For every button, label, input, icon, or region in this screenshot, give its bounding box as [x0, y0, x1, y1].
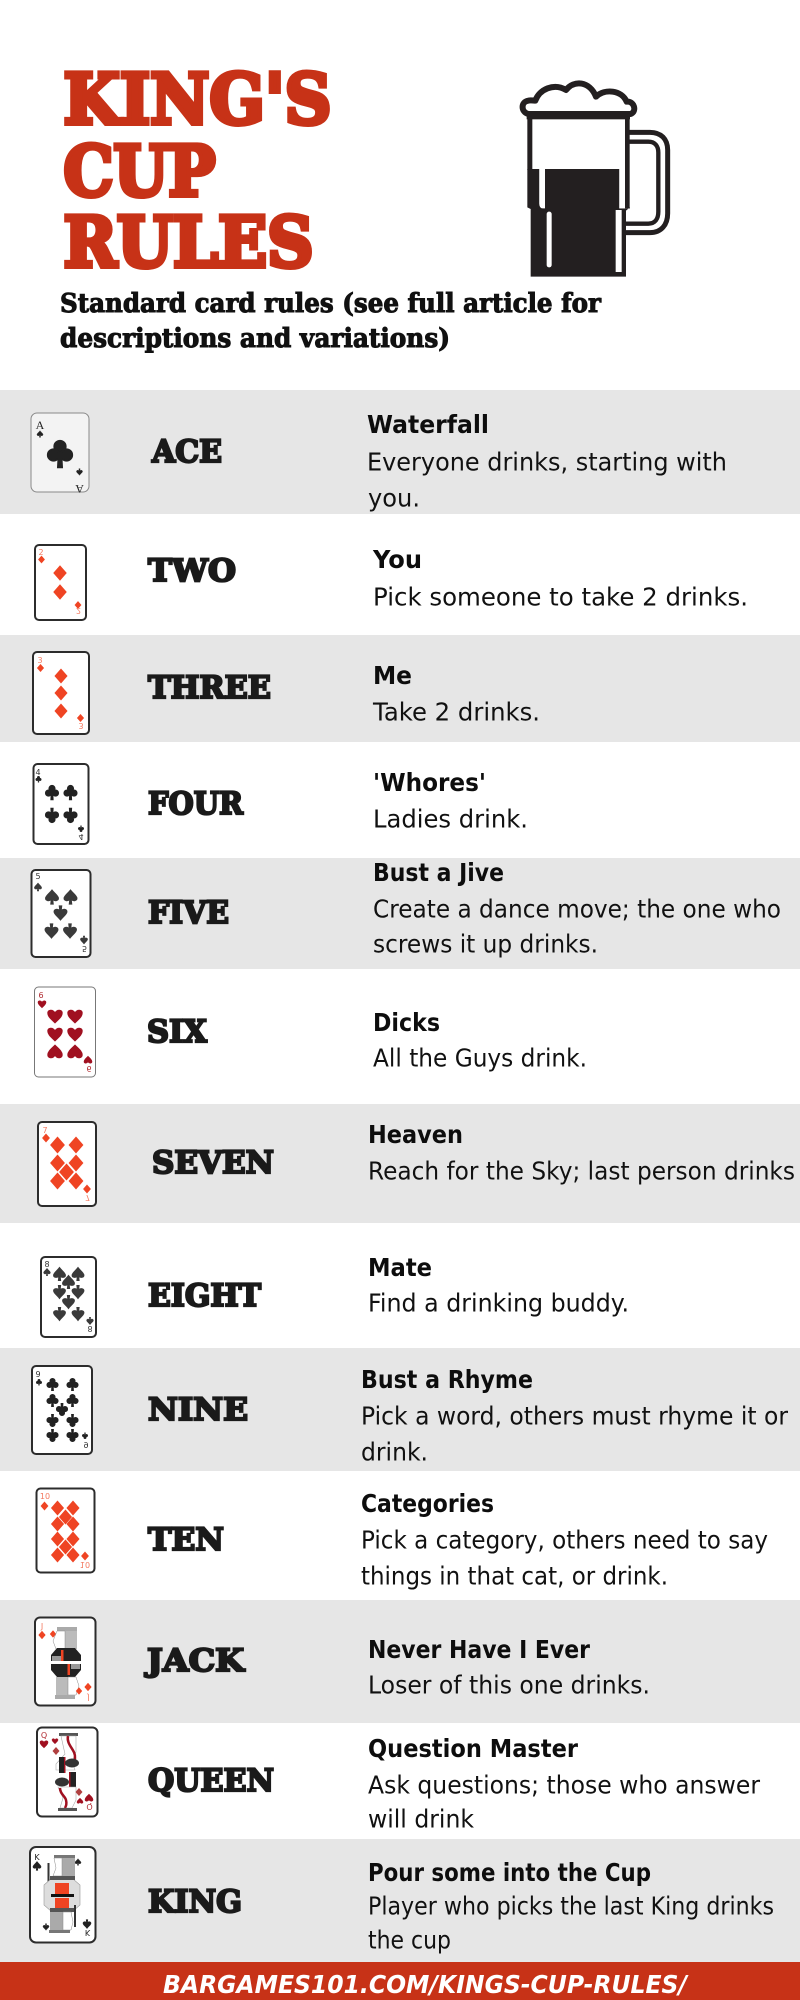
icon: ace of clubs card	[31, 413, 89, 496]
rule: Bust a Rhyme: drink.	[361, 1438, 428, 1466]
rule: 'Whores'	[373, 768, 528, 834]
label: FOUR: FOUR	[148, 786, 243, 822]
icon: jack of diamonds card: J	[86, 1693, 90, 1702]
icon: nine of clubs card: 9	[83, 1440, 89, 1449]
rule: Waterfall	[367, 410, 727, 512]
icon: seven of diamonds card: 7	[42, 1126, 48, 1135]
label: EIGHT: EIGHT	[148, 1278, 261, 1314]
panel: eight	[41, 1253, 629, 1337]
subtitle: Standard card rules (see full article for	[60, 289, 601, 319]
rule: 'Whores': 'Whores'	[373, 768, 486, 797]
subtitle	[60, 289, 601, 354]
rule: Question Master: Question Master	[368, 1734, 579, 1763]
label: TWO: TWO	[148, 553, 236, 589]
rule: Never Have I Ever: Never Have I Ever	[368, 1635, 591, 1664]
rule: Bust a Jive: Create a dance move; the one who	[373, 894, 781, 924]
icon: two of diamonds card: 2	[76, 606, 81, 615]
rule: Heaven	[368, 1120, 795, 1186]
rule: Heaven: Heaven	[368, 1120, 463, 1149]
rule: Waterfall: Waterfall	[367, 410, 489, 439]
rule: Categories	[361, 1489, 768, 1590]
rule: Mate	[368, 1253, 629, 1318]
panel: ace	[0, 390, 800, 514]
icon: three of diamonds card	[33, 652, 89, 734]
rule: Me: Take 2 drinks.	[372, 698, 540, 726]
rule: Dicks: All the Guys drink.	[373, 1044, 587, 1072]
icon: ten of diamonds card: 10	[80, 1560, 90, 1569]
label: FIVE: FIVE	[148, 895, 229, 931]
title: KING'S	[64, 60, 332, 140]
rule: Question Master: Ask questions; those who answer	[368, 1770, 761, 1800]
label: ACE: ACE	[151, 434, 222, 470]
icon: jack of diamonds card: J	[40, 1622, 43, 1631]
panel: five	[0, 858, 800, 969]
icon: six of hearts card: 6	[86, 1064, 92, 1073]
rule: You	[372, 545, 748, 612]
icon: seven of diamonds card	[38, 1122, 96, 1206]
panel: queen	[37, 1728, 761, 1834]
icon: two of diamonds card: 2	[38, 548, 44, 557]
rule: Me: Me	[373, 661, 412, 690]
icon: five of spades card	[32, 870, 90, 957]
icon: two of diamonds card	[35, 545, 86, 620]
panel: jack	[0, 1600, 800, 1723]
title: RULES	[64, 202, 314, 284]
label: QUEEN: QUEEN	[148, 1763, 274, 1799]
rule: Waterfall: you.	[368, 484, 420, 512]
rule: Pour some into the Cup	[368, 1858, 774, 1954]
subtitle: descriptions and variations)	[60, 324, 450, 354]
icon: eight of spades card: 8	[44, 1260, 50, 1269]
title	[64, 60, 332, 284]
icon: king of spades card: K	[85, 1928, 91, 1937]
icon: four of clubs card: 4	[35, 768, 41, 777]
icon: queen of hearts card: Q	[86, 1802, 93, 1811]
rule: Me	[372, 661, 540, 726]
icon: ace of clubs card: A	[75, 482, 84, 496]
label: NINE: NINE	[148, 1392, 248, 1428]
rule: Bust a Rhyme: Bust a Rhyme	[361, 1365, 533, 1394]
icon: eight of spades card	[41, 1257, 96, 1337]
panel: three	[0, 635, 800, 742]
rule: Mate: Find a drinking buddy.	[368, 1288, 629, 1318]
rule: Waterfall: Everyone drinks, starting with	[367, 448, 727, 476]
icon: three of diamonds card: 3	[37, 656, 43, 665]
icon: queen of hearts card	[37, 1728, 98, 1816]
rule: Bust a Jive: Bust a Jive	[373, 858, 504, 887]
footer banner	[0, 1962, 800, 2000]
panel: two	[35, 545, 748, 620]
rule: Categories: Categories	[361, 1489, 494, 1518]
rule: You: Pick someone to take 2 drinks.	[373, 582, 748, 612]
panel: king	[0, 1839, 800, 1962]
icon: ace of clubs card: A	[36, 418, 45, 432]
icon: five of spades card: 5	[82, 944, 87, 953]
icon: seven of diamonds card: 7	[85, 1193, 90, 1202]
rule: You: You	[372, 545, 422, 574]
panel: nine	[0, 1348, 800, 1471]
icon: ten of diamonds card	[36, 1488, 94, 1572]
icon: king of spades card	[30, 1847, 96, 1942]
rule: Bust a Jive: screws it up drinks.	[373, 930, 598, 958]
label: TEN: TEN	[148, 1522, 224, 1558]
icon: king of spades card: K	[34, 1853, 40, 1862]
rule: Never Have I Ever	[368, 1635, 650, 1700]
panel: four	[34, 764, 528, 844]
panel: ten	[36, 1488, 768, 1590]
footer banner: BARGAMES101.COM/KINGS-CUP-RULES/	[163, 1970, 689, 1999]
label: THREE: THREE	[148, 670, 271, 706]
rule: Categories: things in that cat, or drink.	[361, 1562, 668, 1590]
icon: queen of hearts card: Q	[41, 1731, 47, 1740]
label: SEVEN: SEVEN	[152, 1145, 274, 1181]
rule: Dicks	[373, 1008, 587, 1072]
icon: nine of clubs card: 9	[35, 1370, 41, 1379]
icon: nine of clubs card	[32, 1366, 92, 1454]
icon: eight of spades card: 8	[87, 1324, 93, 1333]
icon: six of hearts card	[34, 987, 96, 1077]
panel: seven	[0, 1104, 800, 1223]
icon: three of diamonds card: 3	[78, 721, 84, 730]
icon: six of hearts card: 6	[38, 991, 44, 1000]
rule: Pour some into the Cup: the cup	[368, 1926, 451, 1954]
label: JACK: JACK	[144, 1643, 245, 1679]
rule: Bust a Jive	[373, 858, 781, 958]
icon: four of clubs card: 4	[78, 832, 84, 841]
rule: Question Master: will drink	[368, 1804, 474, 1834]
icon: five of spades card: 5	[35, 872, 41, 881]
label: SIX: SIX	[147, 1014, 208, 1050]
label: KING: KING	[148, 1884, 242, 1920]
title: CUP	[64, 132, 216, 212]
icon: beer mug	[523, 83, 668, 277]
rule: Bust a Rhyme	[361, 1365, 789, 1466]
panel: six	[34, 987, 587, 1077]
rule: 'Whores': Ladies drink.	[373, 804, 528, 834]
rule: Pour some into the Cup: Pour some into the Cup	[368, 1858, 651, 1887]
icon: ten of diamonds card: 10	[40, 1492, 50, 1501]
rule: Question Master	[368, 1734, 761, 1834]
rule: Dicks: Dicks	[373, 1008, 440, 1037]
rule: Categories: Pick a category, others need to say	[361, 1526, 768, 1554]
icon: jack of diamonds card	[35, 1618, 96, 1706]
rule: Never Have I Ever: Loser of this one drinks.	[368, 1670, 650, 1700]
icon: four of clubs card	[34, 764, 88, 844]
rule: Mate: Mate	[368, 1253, 432, 1282]
